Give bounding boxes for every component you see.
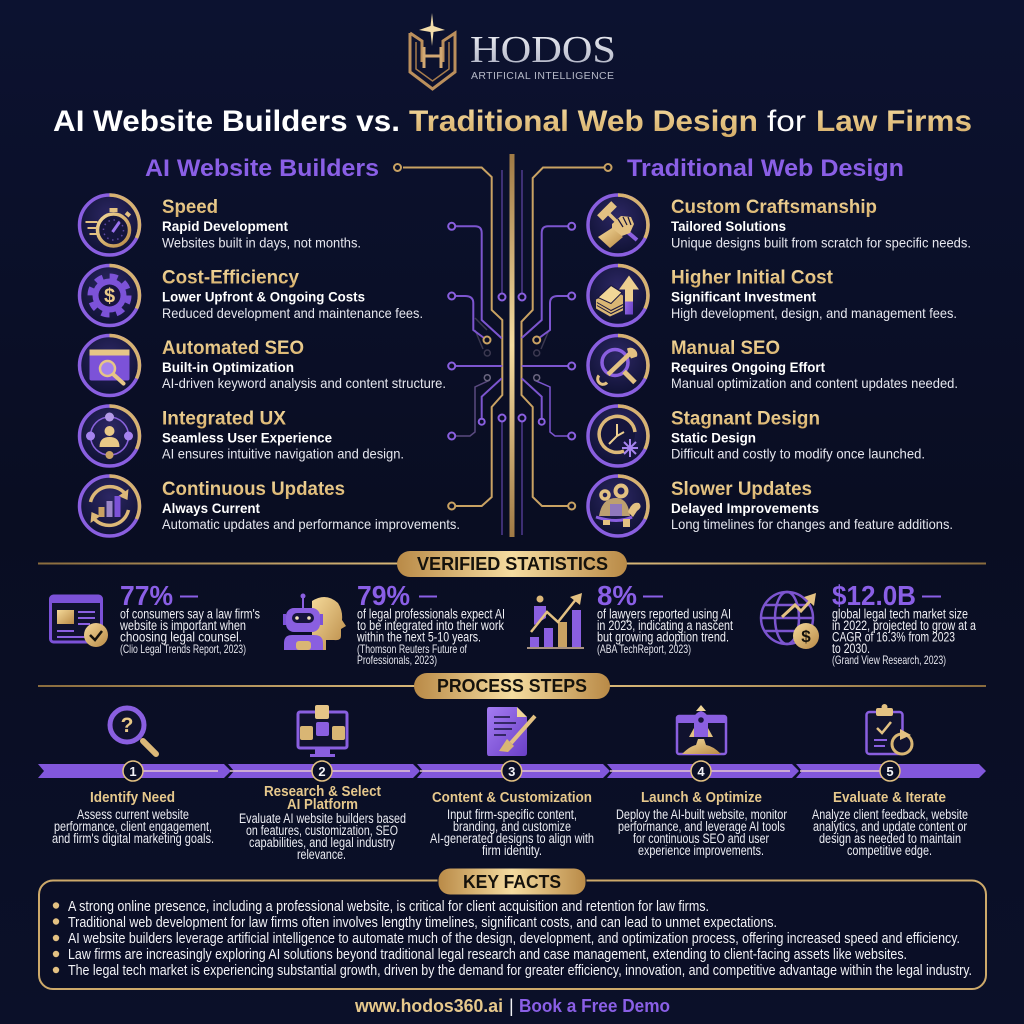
- row: Slower Updates: [588, 476, 953, 536]
- step 1: [52, 708, 214, 846]
- subheading: Tailored Solutions: [671, 218, 786, 234]
- description: for continuous SEO and user: [633, 831, 769, 846]
- icon: user with nodes: [80, 406, 140, 466]
- footer call to action: |: [509, 996, 514, 1016]
- section: verified statistics: [38, 551, 986, 667]
- description: [430, 807, 594, 858]
- description: [812, 807, 968, 858]
- section: process steps: [38, 673, 986, 862]
- heading: Identify Need: [90, 790, 175, 806]
- icon: growth chart: [527, 593, 584, 649]
- subheading: Lower Upfront & Ongoing Costs: [162, 288, 365, 304]
- figure: 79%: [357, 580, 410, 611]
- number: [880, 761, 900, 781]
- step 3: [430, 707, 594, 858]
- central circuit diagram: [394, 154, 612, 537]
- description: competitive edge.: [847, 843, 932, 858]
- text: to be integrated into their work: [357, 618, 504, 633]
- badge: Verified Statistics: [397, 551, 627, 577]
- description: AI-driven keyword analysis and content structure.: [162, 375, 446, 391]
- text: in 2023, indicating a nascent: [597, 618, 733, 633]
- number: [123, 761, 143, 781]
- icon: clipboard with refresh: [866, 704, 912, 754]
- subheading: Significant Investment: [671, 288, 816, 304]
- icon: shield with star: [410, 13, 455, 89]
- description: [52, 807, 214, 846]
- footer call to action: Book a Free Demo: [519, 996, 670, 1016]
- description: AI-generated designs to align with: [430, 831, 594, 846]
- step 5: [812, 704, 968, 858]
- heading: AI Platform: [287, 797, 358, 813]
- row: Integrated UX: [80, 406, 404, 466]
- heading: Higher Initial Cost: [671, 268, 834, 288]
- heading: Speed: [162, 197, 218, 218]
- figure: $12.0B: [832, 580, 916, 611]
- figure: 77%: [120, 580, 173, 611]
- text: to 2030.: [832, 641, 870, 656]
- icon: wrench and magnifier: [588, 336, 648, 396]
- description: relevance.: [297, 847, 346, 862]
- icon: turtle with gears: [588, 476, 648, 536]
- heading: Integrated UX: [162, 408, 286, 430]
- text: within the next 5-10 years.: [356, 630, 481, 644]
- title: Traditional Web Design: [409, 105, 758, 138]
- text: of lawyers reported using AI: [597, 606, 731, 622]
- text: (Clio Legal Trends Report, 2023): [120, 642, 246, 656]
- subheading: Rapid Development: [162, 218, 288, 234]
- number: 4: [697, 764, 705, 779]
- icon: fist with hammer: [588, 195, 648, 255]
- icon: browser with check: [50, 596, 108, 647]
- tagline: ARTIFICIAL INTELLIGENCE: [471, 70, 614, 82]
- title: Law Firms: [816, 105, 972, 138]
- row: Higher Initial Cost: [588, 266, 957, 326]
- heading: AI Website Builders: AI Website Builders: [145, 155, 379, 182]
- badge: Process Steps: [414, 673, 610, 699]
- heading: Stagnant Design: [671, 408, 820, 430]
- heading: Content & Customization: [432, 790, 592, 806]
- stat: $12.0B: [761, 580, 976, 667]
- icon: refresh with bars: [80, 476, 140, 536]
- text: CAGR of 16.3% from 2023: [832, 630, 955, 644]
- description: Evaluate AI website builders based: [239, 811, 406, 826]
- heading: Manual SEO: [671, 338, 780, 359]
- text: [597, 606, 733, 656]
- badge: Process Steps: PROCESS STEPS: [437, 676, 587, 696]
- description: capabilities, and legal industry: [249, 835, 395, 850]
- icon: dollar gear: $: [104, 286, 115, 308]
- timeline arrow: [38, 764, 986, 778]
- description: Reduced development and maintenance fees.: [162, 305, 423, 321]
- icon: frozen clock: [588, 406, 648, 466]
- subheading: Static Design: [671, 430, 756, 446]
- panel: AI Website Builders features: [80, 195, 460, 536]
- badge: Verified Statistics: VERIFIED STATISTICS: [417, 554, 608, 574]
- icon: globe with dollar: [761, 592, 819, 649]
- text: but growing adoption trend.: [597, 630, 729, 644]
- description: branding, and customize: [453, 819, 571, 834]
- row: Continuous Updates: [80, 476, 460, 536]
- text: choosing legal counsel.: [120, 630, 242, 644]
- step 4: [616, 705, 787, 858]
- number: 5: [886, 764, 894, 779]
- description: Assess current website: [77, 807, 189, 822]
- number: 3: [508, 764, 515, 779]
- panel: Traditional Web Design features: [588, 195, 971, 536]
- text: website is important when: [119, 618, 246, 633]
- heading: [264, 784, 381, 813]
- panel: key facts: [39, 868, 986, 989]
- description: AI ensures intuitive navigation and design.: [162, 446, 404, 462]
- description: design as needed to maintain: [819, 831, 961, 846]
- badge: Key Facts: KEY FACTS: [463, 872, 561, 892]
- description: Input firm-specific content,: [447, 807, 577, 822]
- bullet list: Law firms are increasingly exploring AI solutions beyond traditional legal research and case management, extending to client-facing assets like websites.: [68, 947, 907, 963]
- number: 2: [318, 764, 326, 779]
- stat: 79%: [283, 580, 505, 667]
- icon: stopwatch: [80, 195, 140, 255]
- description: Manual optimization and content updates needed.: [671, 375, 958, 391]
- description: Difficult and costly to modify once launched.: [671, 446, 925, 462]
- bullet list: Traditional web development for law firms often involves lengthy timelines, significant costs, and can lead to unmet expectations.: [68, 915, 777, 931]
- icon: question magnifier: [110, 708, 156, 754]
- stat: 8%: [527, 580, 733, 656]
- number: 1: [129, 764, 137, 779]
- footer call to action: [354, 996, 670, 1016]
- icon: SEO window with magnifier: [80, 336, 140, 396]
- heading: Custom Craftsmanship: [671, 197, 877, 218]
- description: [239, 811, 406, 862]
- text: of legal professionals expect AI: [357, 606, 505, 622]
- description: on features, customization, SEO: [246, 823, 398, 838]
- text: (ABA TechReport, 2023): [597, 642, 691, 656]
- heading: Continuous Updates: [162, 479, 345, 500]
- heading: Automated SEO: [162, 338, 304, 359]
- row: Cost-Efficiency: [80, 266, 423, 326]
- icon: globe with dollar: $: [801, 627, 811, 646]
- row: Automated SEO: [80, 336, 446, 396]
- bullet list: [53, 899, 972, 979]
- number: [312, 761, 332, 781]
- text: [119, 606, 260, 656]
- wordmark: HODOS: [470, 29, 616, 71]
- figure: 8%: [597, 580, 637, 611]
- icon: question magnifier: ?: [121, 714, 133, 737]
- logo: [410, 13, 616, 89]
- icon: money stack with arrow: [588, 266, 648, 326]
- description: analytics, and update content or: [813, 819, 967, 834]
- text: in 2022, projected to grow at a: [832, 618, 976, 633]
- description: Deploy the AI-built website, monitor: [616, 807, 787, 822]
- description: Analyze client feedback, website: [812, 807, 968, 822]
- badge: Key Facts: [438, 868, 586, 895]
- heading: Research & Select: [264, 784, 381, 800]
- text: global legal tech market size: [832, 606, 968, 622]
- subheading: Always Current: [162, 500, 260, 516]
- heading: Slower Updates: [671, 479, 812, 500]
- subheading: Delayed Improvements: [671, 500, 819, 516]
- description: performance, client engagement,: [54, 819, 212, 834]
- description: Websites built in days, not months.: [162, 234, 361, 250]
- description: and firm's digital marketing goals.: [52, 831, 214, 846]
- text: [356, 606, 505, 667]
- description: Automatic updates and performance improvements.: [162, 516, 460, 532]
- heading: Launch & Optimize: [641, 790, 762, 806]
- title: AI Website Builders vs.: [53, 105, 400, 138]
- text: Professionals, 2023): [357, 653, 437, 667]
- text: of consumers say a law firm's: [120, 606, 260, 622]
- description: experience improvements.: [638, 843, 764, 858]
- heading: Evaluate & Iterate: [833, 790, 946, 806]
- icon: document and brush: [487, 707, 535, 756]
- description: [616, 807, 787, 858]
- text: [832, 606, 976, 667]
- subheading: Built-in Optimization: [162, 359, 294, 375]
- text: (Thomson Reuters Future of: [357, 642, 467, 656]
- description: firm identity.: [482, 843, 542, 858]
- row: Custom Craftsmanship: [588, 195, 971, 255]
- row: Stagnant Design: [588, 406, 925, 466]
- bullet list: A strong online presence, including a professional website, is critical for client acquisition and retention for law firms.: [68, 899, 709, 915]
- row: Speed: [80, 195, 361, 255]
- stat: 77%: [50, 580, 260, 656]
- icon: rocket launch in browser: [677, 705, 726, 754]
- number: [502, 761, 522, 781]
- subheading: Requires Ongoing Effort: [671, 359, 825, 375]
- description: performance, and leverage AI tools: [618, 819, 785, 834]
- title: for: [767, 105, 806, 138]
- text: (Grand View Research, 2023): [832, 653, 946, 667]
- heading: Cost-Efficiency: [162, 268, 299, 288]
- description: High development, design, and management fees.: [671, 305, 957, 321]
- icon: monitor with AI tiles: [298, 705, 347, 757]
- icon: robot and human head: [283, 594, 346, 650]
- description: Long timelines for changes and feature additions.: [671, 516, 953, 532]
- title: [53, 105, 972, 138]
- step 2: [239, 705, 406, 862]
- icon: dollar gear: [80, 266, 140, 326]
- subheading: Seamless User Experience: [162, 430, 332, 446]
- footer call to action: www.hodos360.ai: [354, 996, 503, 1016]
- number: [691, 761, 711, 781]
- description: Unique designs built from scratch for specific needs.: [671, 234, 971, 250]
- heading: Traditional Web Design: Traditional Web Design: [627, 155, 904, 182]
- row: Manual SEO: [588, 336, 958, 396]
